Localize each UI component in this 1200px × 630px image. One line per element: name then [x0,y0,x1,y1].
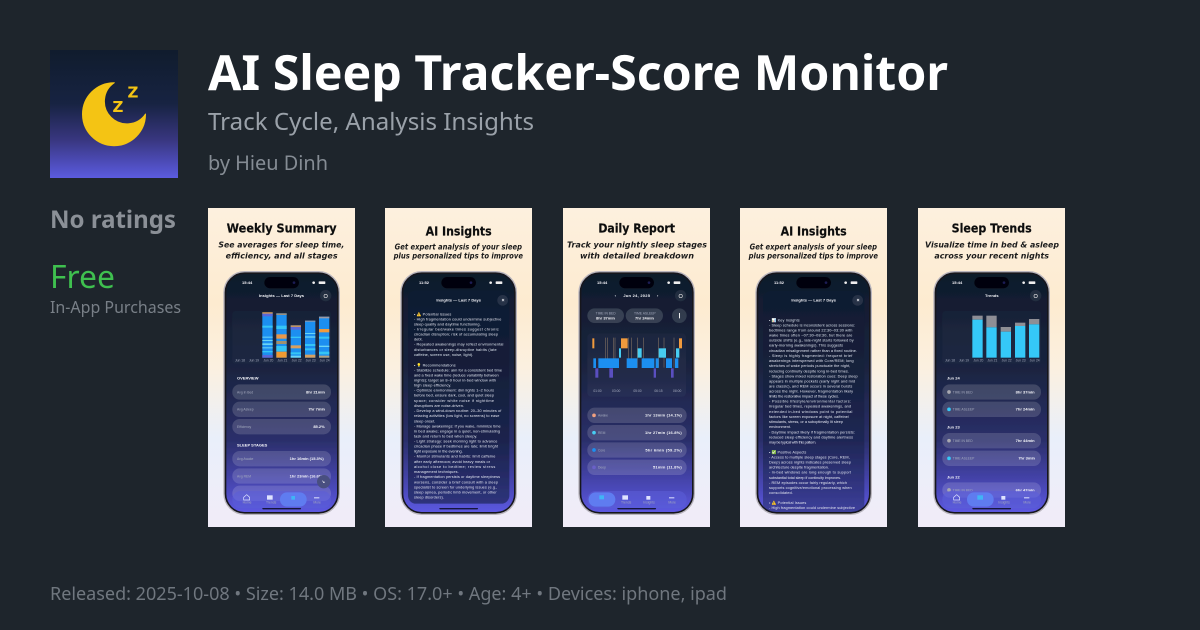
screenshot: AI insights 1 [385,208,532,527]
screenshot: weekly summary: efficiency, and all stages [226,250,338,260]
screenshot: daily report: 06:15 [654,389,663,393]
screenshot: weekly summary: Jun 18 [235,358,245,362]
screenshot: sleep trends: Home [953,500,962,504]
app icon: moon with z's: Z [112,98,124,116]
screenshot: AI insights 2: - Daytime impact likely if fragmentation persists: [769,430,855,434]
screenshot: daily report: 15:44 [597,280,608,285]
screenshot: daily report: Track your nightly sleep stages [567,240,707,250]
screenshot: daily report: 05:00 [633,389,642,393]
screenshot: AI insights 1: - Monitor stimulants and habits: limit caffeine [414,455,495,459]
screenshot: AI insights 2: - Sleep is highly fragmented: frequent brief [769,354,853,358]
screenshot: weekly summary: Jun 24 [320,358,330,362]
screenshot: weekly summary: Avg In Bed [237,390,253,394]
screenshot: AI insights 2: bedtimes range from around 22:30–03:30 with [769,329,852,333]
screenshot: AI insights 1: - Irregular bed/wake times suggest chronic [414,328,499,332]
screenshot: AI insights 2: limits the restorative impact of these cycles. [769,395,839,399]
screenshot: sleep trends: Jun 19 [959,358,969,362]
screenshot: AI insights 1: task and return to bed when sleepy. [414,434,477,438]
screenshot: AI insights 2: reduced sleep efficiency and daytime alertness [769,435,853,439]
screenshot: weekly summary: Insights — Last 7 Days [259,293,305,298]
screenshot: AI insights 1: caffeine, screen use, noise, light). [414,353,473,357]
screenshot: weekly summary: OVERVIEW [237,376,259,381]
screenshot: daily report: Awake [598,414,608,418]
screenshot: AI insights 1: and a fixed wake time (reduce variability between [414,373,499,377]
screenshot: AI insights 1: after early afternoon; avoid heavy meals or [414,460,491,464]
screenshot: AI insights 2: reducing continuity despite long in-bed times. [769,369,849,373]
screenshot: AI insights 2: - Stages show mixed restoration cues: Deep sleep [769,374,858,378]
screenshot: AI insights 2 [740,208,887,527]
screenshot: weekly summary: ↘ [322,479,325,484]
screenshot: sleep trends: More [1023,500,1031,504]
screenshot: sleep trends: TIME IN BED [953,488,973,492]
screenshot: sleep trends: Trends [985,293,999,298]
screenshot: AI insights 2: early-morning awakenings). This suggests [769,344,843,348]
screenshot: AI insights 1: before bed, ensure dark, cool, and quiet sleep [414,394,494,398]
screenshot: AI insights 1: circadian disruption; risk of accumulating sleep [414,333,498,337]
screenshot: weekly summary: 8hr 21min [306,389,325,394]
screenshot: sleep trends: Visualize time in bed & asleep [925,240,1059,250]
screenshot: weekly summary: Home [243,500,252,504]
screenshot: AI insights 2: environment. [769,425,791,429]
screenshot: daily report: 5hr 6min (59.2%) [645,447,682,452]
screenshot: AI insights 2: circadian misalignment rather than a fixed routine. [769,349,857,353]
screenshot: AI insights 2: stretches of wake periods punctuate the night, [769,364,850,368]
screenshot: AI insights 1: Insights — Last 7 Days [436,298,482,303]
screenshot: AI insights 2: supports cognitive/emotional processing when [769,486,852,490]
screenshot: sleep trends: Jun 21 [987,358,997,362]
screenshot: sleep trends: Jun 24 [947,376,960,381]
screenshot: AI insights 1: nights); target an 8–9 hour in-bed window with [414,379,496,383]
screenshot: AI insights 2: AI Insights [781,224,847,238]
screenshot: AI insights 1: disturbances or sleep-disruptive habits (late [414,348,497,352]
screenshot: weekly summary: Jun 19 [249,358,259,362]
screenshot: AI insights 2: Deep) across nights indicates preserved sleep [769,461,851,465]
screenshot: weekly summary: Jun 20 [263,358,273,362]
screenshot: daily report: Insights [643,500,655,504]
developer: by Hieu Dinh [208,149,328,176]
subtitle: Track Cycle, Analysis Insights [208,105,534,138]
footer metadata: Released: 2025-10-08 • Size: 14.0 MB • OS: 17.0+ • Age: 4+ • Devices: iphone, ipad [50,582,727,606]
screenshot: weekly summary: 15:44 [242,280,253,285]
screenshot: weekly summary: SLEEP STAGES [237,442,268,447]
screenshot: daily report: 7hr 24min [635,316,654,321]
screenshot: daily report: 8hr 37min [596,316,615,321]
screenshot: AI insights 1: light exposure in the evening. [414,450,463,454]
screenshot: AI insights 2: Insights — Last 7 Days [791,298,837,303]
screenshot: daily report: 03:00 [612,389,620,393]
in-app purchases note: In-App Purchases [50,296,181,318]
screenshot: daily report: Jun 24, 2025 [623,293,651,298]
screenshot: weekly summary: Jun 22 [292,358,302,362]
screenshot: daily report: 1hr 27min (16.8%) [645,430,682,435]
title: AI Sleep Tracker-Score Monitor [208,40,948,105]
screenshot: AI insights 2: • ✅ Positive Aspects [769,449,806,454]
screenshot: AI insights 1: relaxing activities (low light, no screens) to ease [414,414,499,418]
screenshot: daily report: More [668,500,676,504]
screenshot: sleep trends: Jun 20 [973,358,983,362]
screenshot: AI insights 1: • 💡 Recommendations [414,362,456,367]
screenshot: daily report: 1hr 13min (14.1%) [645,413,682,418]
screenshot: weekly summary [208,208,355,527]
screenshot: weekly summary: Weekly Summary [227,221,337,235]
screenshot: sleep trends: Jun 22 [1002,358,1012,362]
screenshot: AI insights 2: - High fragmentation could undermine subjective [769,506,855,510]
screenshot: AI insights 1: - Repeated awakenings may reflect environmental [414,343,503,347]
screenshot: AI insights 2: substantial total sleep if continuity improves. [769,476,841,480]
screenshot: AI insights 1: - If fragmentation persists or daytime sleepiness [414,475,500,479]
screenshot: AI insights 2: - In-bed windows are long enough to support [769,471,852,475]
screenshot: daily report: ‹ [615,293,617,298]
screenshot: daily report: 08:00 [673,389,681,393]
screenshot: AI insights 2: are classic), and REM occurs in several bursts [769,384,852,388]
screenshot: sleep trends: Jun 23 [947,425,960,430]
screenshot: AI insights 2: • ⚠️ Potential Issues [769,500,806,505]
screenshot: AI insights 1: - Stabilize schedule: aim for a consistent bed time [414,368,502,372]
screenshot: daily report: with detailed breakdown [580,250,694,260]
screenshot: AI insights 1: - Light strategy: seek morning light to advance [414,440,497,444]
screenshot: daily report: › [657,293,659,298]
screenshot: AI insights 2: extended in-bed windows point to potential [769,410,852,414]
screenshot: sleep trends: Sleep Trends [952,221,1032,235]
screenshot: AI insights 1: sleep disorders). [414,495,444,499]
screenshot: AI insights 2: wake times often ~07:30–08:30, but there are [769,334,852,338]
rating: No ratings [50,203,176,236]
screenshot: AI insights 2: - Possible lifestyle/environmental factors: [769,400,851,404]
screenshot: daily report: TIME ASLEEP [634,311,656,315]
screenshot: sleep trends: 7hr 44min [1016,438,1035,443]
screenshot: AI insights 1: disruptions are noise-driven. [414,404,464,408]
screenshot: AI insights 2: stimulants, stress, or a suboptimally lit sleep [769,420,843,424]
screenshot: AI insights 2: across the night. However, fragmentation likely [769,390,853,394]
screenshot: daily report: Daily Report [598,221,675,235]
screenshot: AI insights 2: - REM episodes occur fairly regularly, which [769,481,847,485]
screenshot: AI insights 1: sleep quality and daytime functioning. [414,322,481,326]
screenshot: AI insights 2: irregular bed times, repeated awakenings, and [769,405,851,409]
screenshot: AI insights 1: sleep onset. [414,419,435,423]
screenshot: sleep trends: TIME ASLEEP [953,408,975,412]
screenshot: sleep trends: across your recent nights [934,250,1049,260]
screenshot: AI insights 1: in bed awake; engage in a quiet, non-stimulating [414,429,500,433]
screenshot: daily report [563,208,710,527]
screenshot: sleep trends: Jun 24 [1030,358,1040,362]
screenshot: AI insights 1: alcohol close to bedtime; review stress [414,465,495,469]
screenshot: weekly summary: 7hr 7min [308,407,326,412]
screenshot: AI insights 2: consolidated. [769,491,793,495]
screenshot: AI insights 1: sleep apnea, periodic limb movement, or other [414,490,497,494]
screenshot: AI insights 2: • 📊 Key Insights [769,317,800,322]
screenshot: sleep trends [918,208,1065,527]
screenshot: weekly summary: Jun 21 [277,358,287,362]
screenshot: sleep trends: Jun 22 [947,474,960,479]
screenshot: AI insights 1: - High fragmentation could undermine subjective [414,317,501,321]
screenshot: AI insights 1: space; consider white noise if nighttime [414,399,494,403]
app icon: moon with z's [50,50,178,178]
screenshot: AI insights 1: worsens, consider a brief consult with a sleep [414,480,498,484]
screenshot: AI insights 2: 11:52 [774,280,785,285]
screenshot: sleep trends: TIME IN BED [953,390,973,394]
screenshot: AI insights 2: - Access to multiple sleep stages (Core, REM, [769,456,850,460]
screenshot: AI insights 1: - Develop a wind-down routine: 20–30 minutes of [414,409,502,413]
screenshot: AI insights 2: appears in multiple pockets (early night and mid [769,379,855,383]
screenshot: AI insights 1: AI Insights [426,224,492,238]
screenshot: sleep trends: 7hr 3min [1018,456,1036,461]
screenshot: daily report: Deep [598,466,606,470]
screenshot: sleep trends: TIME IN BED [953,439,973,443]
screenshot: daily report: REM [598,431,606,435]
screenshot: AI insights 1: 11:52 [419,280,430,285]
screenshot: weekly summary: 85.2% [313,424,325,429]
screenshot: sleep trends: Jun 18 [945,358,955,362]
screenshot: AI insights 1: • ⚠️ Potential Issues [414,311,451,316]
screenshot: AI insights 1: debt. [414,338,423,342]
screenshot: AI insights 2: awakenings interspersed with Core/REM; long [769,359,854,363]
screenshot: weekly summary: 1hr 23min (16.6%) [290,473,324,478]
screenshot: AI insights 1: specialist to screen for underlying issues (e.g., [414,485,497,489]
screenshot: sleep trends: Jun 23 [1016,358,1026,362]
screenshot: daily report: Trends [621,500,632,504]
screenshot: weekly summary: 1hr 16min (15.3%) [290,456,324,461]
screenshot: sleep trends: 7hr 24min [1016,407,1035,412]
screenshot: AI insights 1: circadian phase if bedtimes are late; limit bright [414,445,499,449]
screenshot: AI insights 1: management techniques. [414,470,459,474]
screenshot: AI insights 1: - Optimize environment: dim lights 1–2 hours [414,389,494,393]
screenshot: sleep trends: 15:44 [952,280,963,285]
screenshot: weekly summary: Avg Asleep [237,408,254,412]
screenshot: AI insights 2: outside shifts (e.g., late-night starts followed by [769,339,854,343]
screenshot: weekly summary: Jun 23 [306,358,316,362]
screenshot: weekly summary: Trends [266,500,277,504]
app icon: moon with z's: Z [128,84,138,102]
screenshot: sleep trends: 6hr 47min [1016,487,1035,492]
screenshot: AI insights 2: may be typical with this pattern. [769,440,816,444]
screenshot: AI insights 2: ✕ [856,298,860,303]
screenshot: daily report: 01:00 [593,389,602,393]
screenshot: sleep trends: TIME ASLEEP [953,457,975,461]
screenshot: AI insights 2: - Sleep schedule is inconsistent across sessions: [769,323,855,327]
screenshot: weekly summary: More [313,500,321,504]
screenshot: AI insights 1: high sleep efficiency. [414,384,451,388]
screenshot: daily report: TIME IN BED [596,311,616,315]
screenshot: weekly summary: See averages for sleep time, [218,240,344,250]
screenshot: weekly summary: Avg Awake [237,457,253,461]
screenshot: AI insights 2: factors like screen exposure at night, caffeine/ [769,415,850,419]
screenshot: weekly summary: Efficiency [237,425,252,429]
screenshot: weekly summary: Avg REM [237,474,251,478]
screenshot: daily report: 51min (11.8%) [653,465,682,470]
screenshot: AI insights 1: ✕ [501,298,505,303]
screenshot: AI insights 1: - Manage awakenings: if you wake, minimize time [414,424,501,428]
screenshot: sleep trends: Insights [998,500,1010,504]
price: Free [50,255,115,298]
screenshot: daily report: Core [598,448,605,452]
screenshot: sleep trends: 8hr 37min [1016,389,1035,394]
screenshot: AI insights 2: architecture despite fragmentation. [769,466,829,470]
